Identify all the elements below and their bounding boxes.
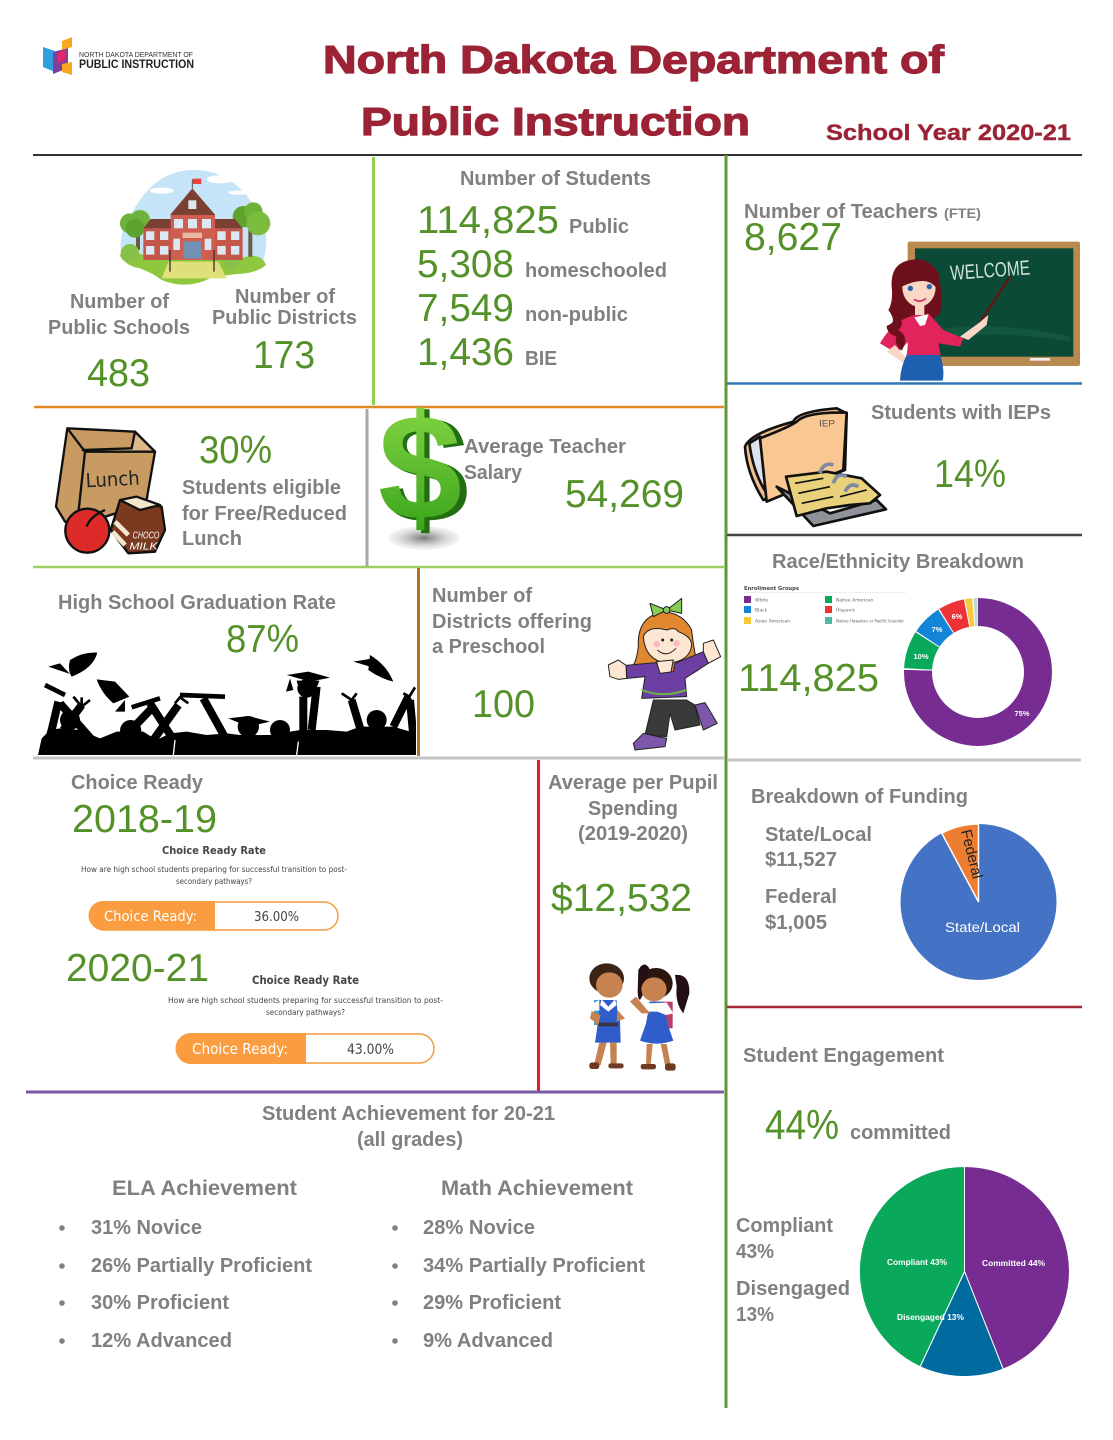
card: choice ready rate 2020-21: Choice Ready Rate bbox=[252, 973, 359, 987]
list: ELA achievement: ELA Achievement bbox=[112, 1177, 297, 1200]
panel: average per pupil spending: (2019-2020) bbox=[578, 823, 688, 845]
panel: student engagement bbox=[736, 1045, 1069, 1377]
legend: enrollment groups: Black bbox=[755, 608, 768, 614]
panel: number of students: 5,308 bbox=[417, 243, 514, 286]
panel: breakdown of funding bbox=[751, 786, 1056, 980]
card: choice ready rate 2018-19 bbox=[81, 844, 347, 930]
icon: lunch bag with apple and milk bbox=[56, 428, 165, 553]
panel: student engagement: 43% bbox=[736, 1241, 774, 1263]
panel: student engagement: 13% bbox=[736, 1304, 774, 1326]
text: free/reduced lunch eligibility bbox=[182, 429, 347, 550]
title bbox=[323, 39, 945, 144]
text: free/reduced lunch eligibility: Lunch bbox=[182, 528, 242, 550]
card: choice ready rate 2020-21: Choice Ready: bbox=[192, 1040, 288, 1058]
text: number of public districts: Public Districts bbox=[212, 307, 357, 329]
panel: number of teachers: 8,627 bbox=[744, 216, 842, 259]
panel: students with IEPs bbox=[745, 402, 1051, 526]
panel: high school graduation rate: 87% bbox=[226, 618, 299, 661]
list: ELA achievement: 30% Proficient bbox=[91, 1292, 229, 1314]
logo: North Dakota Department of Public Instruction bbox=[43, 37, 194, 75]
panel: average per pupil spending: Average per Pupil bbox=[548, 772, 718, 794]
text: number of public districts bbox=[212, 286, 357, 377]
panel: choice ready: 2018-19 bbox=[72, 798, 217, 841]
text: average teacher salary bbox=[464, 436, 684, 516]
pie chart: engagement: Committed 44% bbox=[982, 1258, 1045, 1268]
text: free/reduced lunch eligibility: Students eligible bbox=[182, 477, 341, 499]
icon: school building bbox=[119, 170, 270, 285]
school year label: School Year 2020-21 bbox=[826, 120, 1071, 145]
panel: districts offering preschool: Districts offering bbox=[432, 611, 592, 633]
panel: student engagement: Compliant bbox=[736, 1215, 833, 1237]
legend: enrollment groups: Hispanic bbox=[836, 608, 856, 614]
panel: number of students: non-public bbox=[525, 304, 628, 326]
icon: lunch bag with apple and milk: Lunch bbox=[85, 467, 140, 492]
text: number of public districts: Number of bbox=[235, 286, 335, 308]
card: choice ready rate 2020-21: 43.00% bbox=[347, 1042, 394, 1058]
icon: teacher at chalkboard bbox=[880, 242, 1080, 381]
icon: green dollar sign: $ bbox=[381, 385, 469, 555]
title: North Dakota Department of bbox=[323, 39, 945, 82]
card: choice ready rate 2018-19: Choice Ready Rate bbox=[162, 844, 266, 857]
text: average teacher salary: 54,269 bbox=[565, 473, 684, 516]
panel: students with IEPs: Students with IEPs bbox=[871, 402, 1051, 424]
legend: enrollment groups: Native Hawaiian or Pacific Islander bbox=[836, 618, 904, 624]
pie chart: funding bbox=[900, 824, 1056, 980]
list: math achievement bbox=[392, 1177, 645, 1352]
text: number of public schools: Number of bbox=[70, 291, 169, 313]
list: ELA achievement: 31% Novice bbox=[91, 1217, 202, 1239]
card: choice ready rate 2020-21: How are high school students preparing for successful transition to post- bbox=[168, 996, 443, 1005]
panel: student achievement: Student Achievement for 20-21 bbox=[262, 1103, 555, 1125]
donut chart: enrollment groups: 6% bbox=[952, 612, 963, 621]
icon: lunch bag with apple and milk: MILK bbox=[129, 541, 159, 552]
list: math achievement: 34% Partially Proficient bbox=[423, 1255, 645, 1277]
panel: number of students: Number of Students bbox=[460, 168, 651, 190]
panel: average teacher salary bbox=[378, 383, 684, 555]
panel: average per pupil spending bbox=[548, 772, 718, 1071]
panel: student engagement: Disengaged bbox=[736, 1278, 850, 1300]
list: math achievement: 29% Proficient bbox=[423, 1292, 561, 1314]
text: average teacher salary: Average Teacher bbox=[464, 436, 626, 458]
panel: number of students: Public bbox=[569, 216, 629, 238]
panel: average per pupil spending: Spending bbox=[588, 798, 678, 820]
donut chart: enrollment groups bbox=[895, 589, 1061, 755]
donut chart: enrollment groups: 7% bbox=[932, 625, 943, 634]
panel: average per pupil spending: $12,532 bbox=[551, 877, 692, 920]
donut chart: enrollment groups: 10% bbox=[913, 652, 929, 661]
panel: number of students: 7,549 bbox=[417, 287, 514, 330]
panel: districts offering preschool: 100 bbox=[472, 683, 535, 726]
panel: race/ethnicity breakdown: Race/Ethnicity Breakdown bbox=[772, 551, 1024, 573]
text: free/reduced lunch eligibility: for Free/Reduced bbox=[182, 503, 347, 525]
text: number of public schools: Public Schools bbox=[48, 317, 190, 339]
panel: student engagement: Student Engagement bbox=[743, 1045, 944, 1067]
panel: number of students: 1,436 bbox=[417, 331, 514, 374]
icon: lunch bag with apple and milk: CHOCO bbox=[133, 530, 159, 541]
panel: breakdown of funding: $1,005 bbox=[765, 912, 827, 934]
list: math achievement: Math Achievement bbox=[441, 1177, 633, 1200]
legend: enrollment groups: Enrollment Groups bbox=[744, 586, 800, 592]
list: math achievement: 28% Novice bbox=[423, 1217, 535, 1239]
list: ELA achievement bbox=[59, 1177, 312, 1352]
icon: IEP folder and binder bbox=[745, 408, 886, 526]
legend: enrollment groups: Native American bbox=[836, 598, 874, 604]
panel: number of students: homeschooled bbox=[525, 260, 667, 282]
panel: student engagement: 44% bbox=[765, 1101, 839, 1148]
icon: two students bbox=[589, 963, 689, 1071]
panel: students with IEPs: 14% bbox=[934, 453, 1006, 496]
text: number of public schools: 483 bbox=[87, 352, 150, 395]
panel: breakdown of funding: Breakdown of Funding bbox=[751, 786, 968, 808]
list: math achievement: 9% Advanced bbox=[423, 1330, 553, 1352]
panel: high school graduation rate bbox=[38, 592, 416, 755]
card: choice ready rate 2018-19: Choice Ready: bbox=[104, 909, 197, 925]
card: choice ready rate 2020-21 bbox=[168, 973, 443, 1064]
card: choice ready rate 2020-21: secondary pathways? bbox=[266, 1008, 345, 1017]
list: ELA achievement: 26% Partially Proficient bbox=[91, 1255, 312, 1277]
panel: number of teachers: Number of Teachers bbox=[744, 201, 938, 223]
logo: North Dakota Department of Public Instruction: NORTH DAKOTA DEPARTMENT OF bbox=[79, 50, 193, 59]
panel: number of students: 114,825 bbox=[417, 199, 559, 242]
logo: North Dakota Department of Public Instruction: PUBLIC INSTRUCTION bbox=[79, 57, 194, 71]
title: Public Instruction bbox=[361, 101, 750, 144]
panel: breakdown of funding: Federal bbox=[765, 886, 837, 908]
panel: number of students bbox=[417, 168, 667, 374]
panel: public schools and districts bbox=[48, 170, 357, 395]
icon: girl jumping bbox=[608, 598, 721, 750]
panel: number of teachers bbox=[744, 201, 1080, 381]
panel: race/ethnicity breakdown bbox=[738, 551, 1061, 755]
text: free/reduced lunch eligibility: 30% bbox=[199, 429, 272, 472]
icon: IEP folder and binder: IEP bbox=[819, 419, 835, 429]
donut chart: enrollment groups: 75% bbox=[1014, 709, 1030, 718]
panel: districts offering preschool bbox=[432, 585, 721, 750]
card: choice ready rate 2018-19: 36.00% bbox=[254, 909, 299, 925]
panel: choice ready: 2020-21 bbox=[66, 947, 209, 990]
panel: choice ready bbox=[66, 772, 443, 1064]
pie chart: engagement: Disengaged 13% bbox=[897, 1312, 964, 1322]
pie chart: engagement bbox=[859, 1166, 1069, 1377]
panel: choice ready: Choice Ready bbox=[71, 772, 204, 794]
panel: student achievement bbox=[59, 1103, 645, 1352]
text: number of public schools bbox=[48, 291, 190, 395]
icon: graduates silhouette bbox=[38, 653, 416, 755]
panel: student achievement: (all grades) bbox=[357, 1129, 463, 1151]
legend: enrollment groups: White bbox=[755, 598, 768, 604]
text: average teacher salary: Salary bbox=[464, 462, 523, 484]
list: ELA achievement: 12% Advanced bbox=[91, 1330, 232, 1352]
panel: high school graduation rate: High School Graduation Rate bbox=[58, 592, 336, 614]
panel: student engagement: committed bbox=[850, 1122, 951, 1144]
card: choice ready rate 2018-19: secondary pathways? bbox=[176, 877, 252, 886]
legend: enrollment groups: Asian American bbox=[755, 618, 790, 624]
panel: number of students: BIE bbox=[525, 348, 557, 370]
icon: teacher at chalkboard: WELCOME bbox=[949, 256, 1031, 285]
panel: number of teachers: (FTE) bbox=[944, 205, 981, 221]
panel: districts offering preschool: a Preschool bbox=[432, 636, 545, 658]
panel: free and reduced lunch bbox=[56, 428, 347, 553]
panel: race/ethnicity breakdown: 114,825 bbox=[738, 657, 879, 700]
pie chart: funding: State/Local bbox=[945, 919, 1020, 935]
panel: districts offering preschool: Number of bbox=[432, 585, 532, 607]
card: choice ready rate 2018-19: How are high school students preparing for successful transition to post- bbox=[81, 865, 347, 874]
pie chart: funding: Federal bbox=[957, 828, 986, 880]
panel: breakdown of funding: State/Local bbox=[765, 824, 872, 846]
text: number of public districts: 173 bbox=[253, 334, 315, 377]
pie chart: engagement: Compliant 43% bbox=[887, 1257, 947, 1267]
legend: enrollment groups bbox=[744, 586, 906, 624]
panel: breakdown of funding: $11,527 bbox=[765, 849, 837, 871]
icon: green dollar sign: $ bbox=[378, 383, 462, 551]
